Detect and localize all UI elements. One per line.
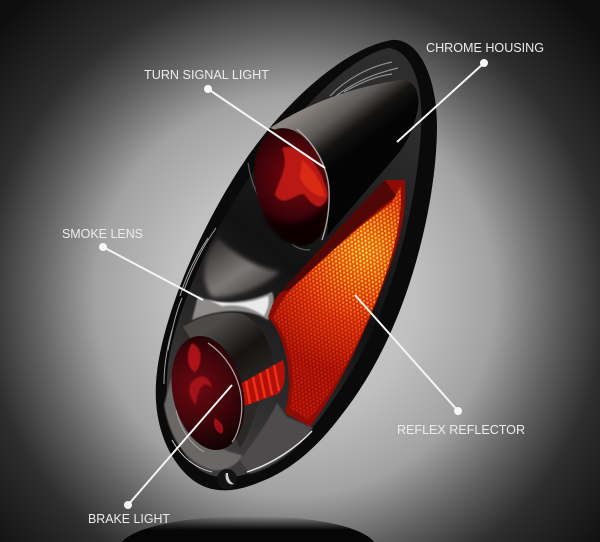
chrome sweep lines left bbox=[164, 228, 216, 384]
tail light assembly bbox=[156, 40, 437, 490]
floor shadow bbox=[122, 516, 374, 542]
callout: turn signal light bbox=[144, 68, 325, 168]
callout: brake light bbox=[88, 385, 232, 526]
callout: chrome housing: CHROME HOUSING bbox=[426, 41, 544, 55]
chrome bridge highlight bbox=[192, 292, 274, 320]
mounting bolt bbox=[217, 469, 237, 489]
brake light housing bbox=[183, 313, 274, 448]
callout: brake light: BRAKE LIGHT bbox=[88, 512, 170, 526]
chrome housing tube bbox=[270, 80, 418, 236]
callout: reflex reflector: REFLEX REFLECTOR bbox=[397, 423, 525, 437]
callout: turn signal light: TURN SIGNAL LIGHT bbox=[144, 68, 269, 82]
brake light lens bbox=[161, 329, 255, 457]
callout: smoke lens: SMOKE LENS bbox=[62, 227, 143, 241]
callout: smoke lens bbox=[62, 227, 203, 300]
chrome sweep upper bbox=[330, 62, 398, 96]
smoke lens bowl bbox=[204, 238, 280, 297]
smoke lens body bbox=[167, 48, 421, 477]
callout: reflex reflector bbox=[355, 295, 525, 437]
turn signal lens bbox=[243, 120, 341, 254]
callout: chrome housing bbox=[397, 41, 544, 142]
black outer rim bbox=[156, 40, 437, 490]
lower bowl silver bbox=[164, 375, 242, 470]
ribbed red section bbox=[240, 360, 285, 406]
chrome trim below reflector bbox=[240, 403, 313, 474]
barrel edge line bbox=[248, 163, 310, 250]
reflex reflector bbox=[268, 180, 405, 427]
